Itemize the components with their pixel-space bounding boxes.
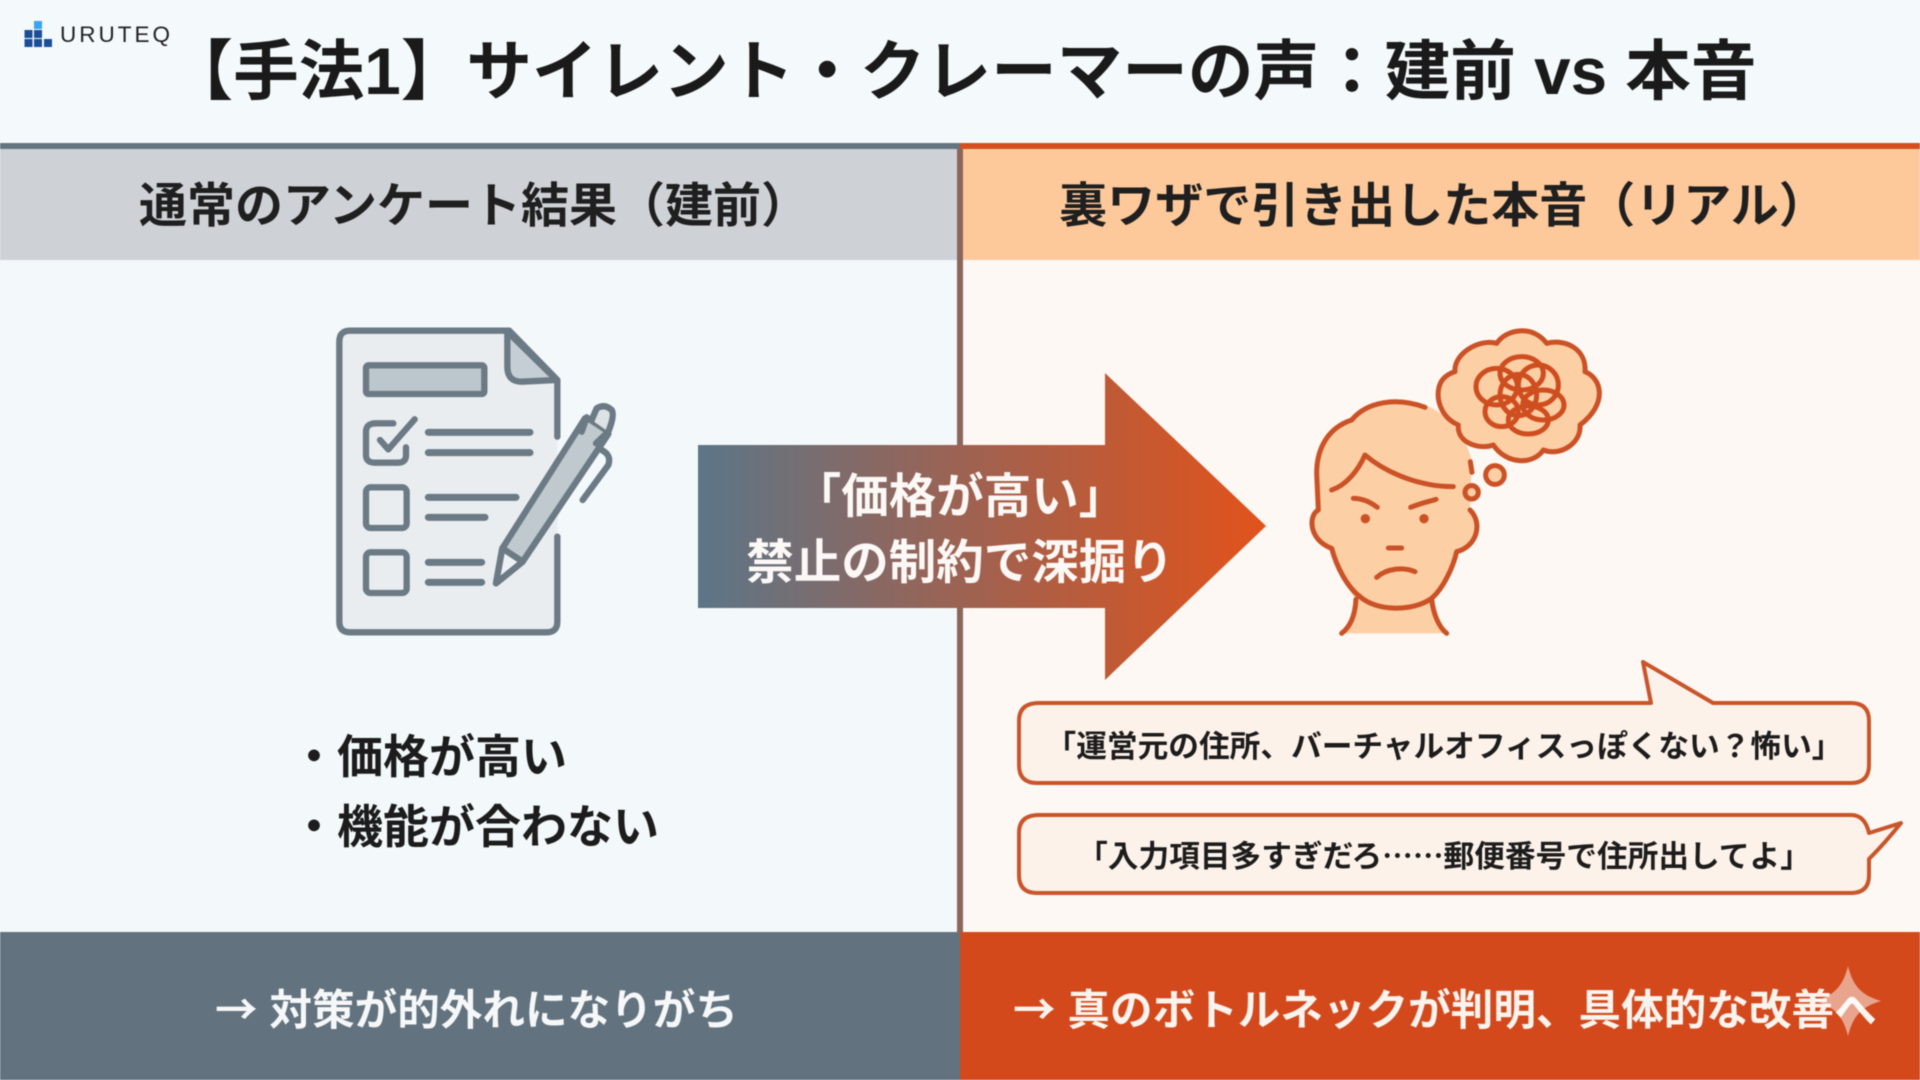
speech bubble 2 — [1016, 812, 1904, 896]
icon: survey clipboard and pen — [336, 326, 616, 636]
bullet 2: ・機能が合わない — [291, 801, 659, 853]
icon: logo blocks — [24, 20, 53, 48]
top band — [0, 0, 1920, 143]
arrow shape — [697, 372, 1266, 680]
bubble 1 shape — [1016, 659, 1872, 786]
right conclusion bar — [960, 932, 1920, 1080]
arrow label — [746, 470, 1174, 590]
bubble 2 shape — [1016, 812, 1904, 896]
logo — [24, 20, 173, 48]
arrow label: 「価格が高い」 — [794, 471, 1126, 524]
title: 【手法1】サイレント・クレーマーの声：建前 vs 本音 — [168, 35, 1756, 108]
left conclusion text: → 対策が的外れになりがち — [215, 977, 738, 1038]
bubble 1 text: 「運営元の住所、バーチャルオフィスっぽくない？怖い」 — [1046, 729, 1842, 764]
arrow label: 禁止の制約で深掘り — [746, 537, 1174, 590]
top rule — [960, 143, 1920, 149]
right heading — [960, 149, 1920, 260]
icon: frustrated person with tangled thought — [1308, 328, 1603, 637]
panel: right real voices — [960, 143, 1920, 1080]
top rule — [0, 143, 960, 149]
logo wordmark: URUTEQ — [60, 22, 173, 47]
bullet list — [291, 731, 659, 853]
right conclusion text: → 真のボトルネックが判明、具体的な改善へ — [1013, 977, 1877, 1038]
bullet 1: ・価格が高い — [291, 731, 567, 783]
icon: sparkle — [1818, 966, 1881, 1036]
left heading — [0, 149, 960, 260]
center divider — [957, 149, 963, 932]
right heading text: 裏ワザで引き出した本音（リアル） — [1059, 180, 1827, 233]
speech bubble 1 — [1016, 659, 1872, 786]
bubble 2 text: 「入力項目多すぎだろ……郵便番号で住所出してよ」 — [1077, 831, 1811, 876]
left heading text: 通常のアンケート結果（建前） — [139, 180, 809, 233]
panel: left survey results — [0, 143, 960, 1080]
arrow: deep dive transition — [697, 372, 1266, 680]
left conclusion bar — [0, 932, 960, 1080]
